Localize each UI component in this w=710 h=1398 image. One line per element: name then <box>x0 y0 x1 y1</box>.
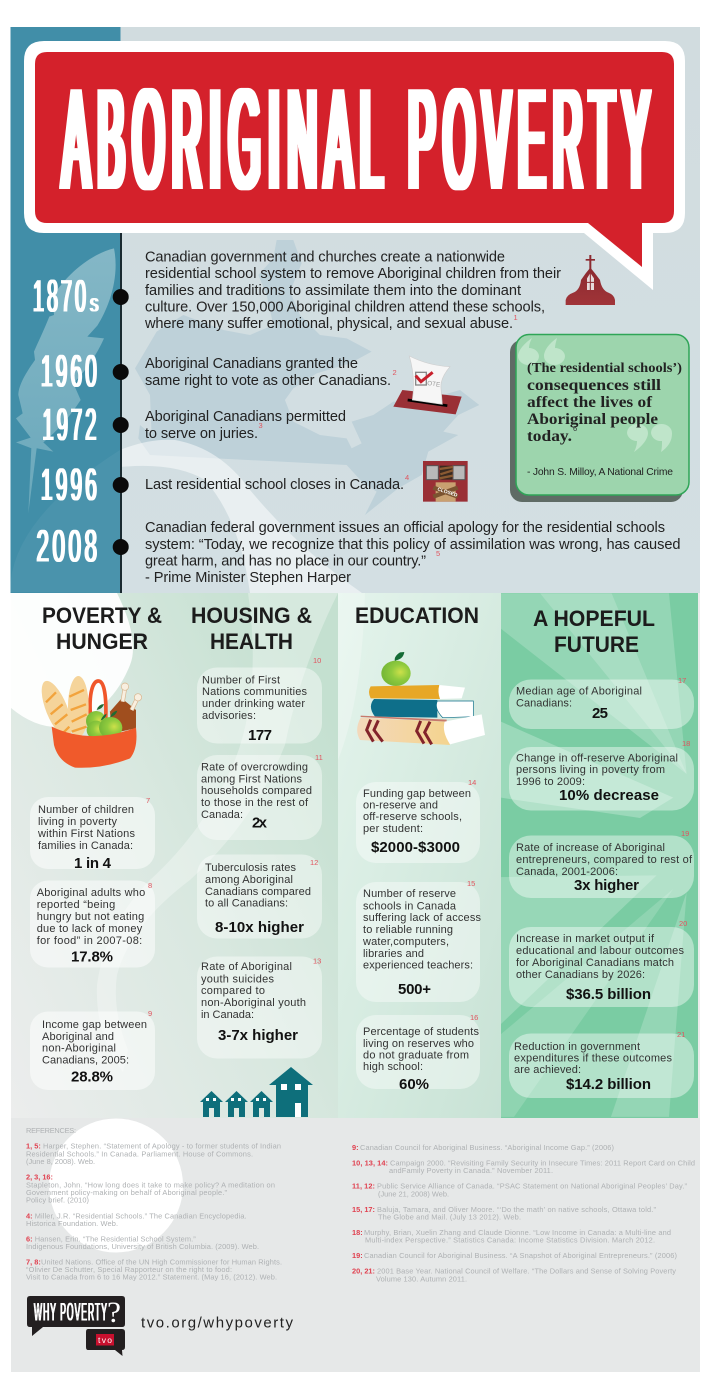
timeline: 1972: to serve on juries. <box>145 426 258 442</box>
references: right column: (June 21, 2008) Web. <box>378 1189 449 1198</box>
stat card: graduation: living on reserves who <box>363 1038 474 1050</box>
references: right column: andFamily Poverty in Canada.” November 2011. <box>389 1166 553 1175</box>
stat card: income gap: Aboriginal and <box>42 1031 114 1043</box>
references: right column: 2001 Base Year. National Council of Welfare. “The Dollars and Sense of Solving Poverty <box>377 1267 676 1276</box>
references: right column: The Globe and Mail. (July 13 2012). Web. <box>378 1213 521 1222</box>
stat card: graduation: 16 <box>470 1013 478 1022</box>
stat card: income gap: non-Aboriginal <box>42 1042 116 1054</box>
references: left column: Historica Foundation. Web. <box>26 1219 118 1228</box>
heading: poverty and hunger <box>42 603 162 654</box>
stat card: poverty decrease: persons living in poverty from <box>516 764 665 776</box>
timeline: 1972 <box>42 399 346 450</box>
stat card: graduation: Percentage of students <box>363 1026 480 1038</box>
heading: a hopeful future <box>533 606 655 657</box>
stat card: youth suicides: 13 <box>313 956 321 966</box>
stat card: children in poverty: within First Nations <box>37 828 136 840</box>
stat card: graduation <box>356 1013 480 1093</box>
panel: education <box>355 603 485 1093</box>
panel: a hopeful future <box>509 606 694 1098</box>
timeline: 1870s: Canadian government and churches create a nationwide <box>145 250 505 266</box>
timeline: 1960: 1960 <box>41 346 100 396</box>
stat card: entrepreneurs: Rate of increase of Aboriginal <box>516 842 665 854</box>
callout: Milloy quote: affect the lives of <box>527 394 653 411</box>
timeline: 1870s: families and traditions to assimilate them into the dominant <box>145 283 521 299</box>
icon: opening quote marks <box>518 338 565 365</box>
callout: Milloy quote: Aboriginal people <box>527 411 658 428</box>
stat card: market output: for Aboriginal Canadians match <box>516 957 674 969</box>
stat card: funding gap: per student: <box>363 823 423 835</box>
references: right column: 19: <box>352 1251 363 1260</box>
timeline: 1972: Aboriginal Canadians permitted <box>145 409 346 425</box>
stat card: drinking water: under drinking water <box>202 698 305 710</box>
icon: closed school: CLOSED <box>436 487 458 499</box>
stat card: reserve schools: suffering lack of access <box>363 912 482 924</box>
stat card: drinking water: 177 <box>248 727 272 744</box>
stat card: funding gap: $2000-$3000 <box>371 839 460 856</box>
stat card: reserve schools <box>356 879 482 1002</box>
stat card: youth suicides: compared to <box>201 985 265 997</box>
stat card: market output: $36.5 billion <box>566 986 651 1003</box>
references: right column: Baluja, Tamara, and Oliver Moore. “‘Do the math’ on native schools, Ottawa told.” <box>377 1205 657 1214</box>
references: right column: 18: <box>352 1228 363 1237</box>
references: left column: REFERENCES: <box>26 1126 76 1135</box>
stat card: reserve schools: water,computers, <box>362 936 449 948</box>
stat card: children in poverty <box>30 796 155 872</box>
stat card: children in poverty: 7 <box>146 796 150 805</box>
references: left column: Stapleton, John. “How long does it take to make policy? A meditation on <box>26 1180 275 1189</box>
references: right column: Murphy, Brian, Xuelin Zhang and Claude Dionne. “Low Income in Canada: a Multi-line and <box>364 1228 671 1237</box>
stat card: hungry adults: for food” in 2007-08: <box>37 935 142 947</box>
stat card: children in poverty: families in Canada: <box>38 840 133 852</box>
logo: Why Poverty?: tvo <box>98 1335 112 1345</box>
stat card: poverty decrease <box>509 739 694 810</box>
timeline: 1996: 1996 <box>41 459 100 510</box>
stat card: funding gap: on-reserve and <box>363 800 438 812</box>
references: right column: Multi-index Perspective.” Statistics Canada: Income Statistics Division. March 2012. <box>365 1236 655 1245</box>
references: left column: Government policy-making on behalf of Aboriginal people.” <box>26 1188 228 1197</box>
references: left column: Hansen, Erin. “The Residential School System.” <box>35 1234 196 1243</box>
timeline: 1870s <box>33 250 561 332</box>
stat card: graduation: 60% <box>399 1076 429 1093</box>
callout: Milloy quote: - John S. Milloy, A National Crime <box>527 467 673 478</box>
stat card: youth suicides: Rate of Aboriginal <box>201 961 292 973</box>
stat card: reserve schools: Number of reserve <box>363 888 456 900</box>
timeline: 1870s: 1870 <box>33 270 89 322</box>
timeline: 1996 <box>41 459 409 510</box>
stat card: drinking water: advisories: <box>202 710 256 722</box>
references: left column: Miller, J.R. “Residential Schools.” The Canadian Encyclopedia. <box>35 1211 247 1220</box>
references: right column: Public Service Alliance of Canada. “PSAC Statement on National Aboriginal Peoples’ Day.” <box>377 1182 688 1191</box>
icon: ballot box: OTE <box>427 380 441 389</box>
stat card: funding gap: 14 <box>468 778 476 787</box>
heading: poverty and hunger: HUNGER <box>56 629 148 654</box>
stat card: hungry adults: hungry but not eating <box>37 911 144 923</box>
heading: a hopeful future: FUTURE <box>554 632 639 657</box>
website url: tvo.org/whypoverty <box>141 1314 294 1332</box>
stat card: tuberculosis: 12 <box>310 858 318 867</box>
references: left column: Indigenous Foundations, University of British Columbia. (2009). Web. <box>26 1242 259 1251</box>
stat card: graduation: do not graduate from <box>363 1050 469 1062</box>
icon: books and apple <box>357 652 485 745</box>
stat card: drinking water <box>197 656 322 744</box>
timeline: 1960: same right to vote as other Canadians. <box>145 373 391 389</box>
timeline: 1972: 3 <box>258 421 263 430</box>
stat card: children in poverty: Number of children <box>38 804 134 816</box>
references: left column: Residential Schools.” In Canada. Parliament. House of Commons. <box>26 1149 253 1158</box>
stat card: hungry adults: due to lack of money <box>37 923 143 935</box>
icon: row of houses <box>200 1067 313 1117</box>
stat card: overcrowding: among First Nations <box>201 774 302 786</box>
stat card: income gap: 28.8% <box>71 1068 113 1086</box>
timeline axis <box>120 233 122 593</box>
references: right column: Canadian Council for Aboriginal Business. “A Snapshot of Aboriginal Entrepreneurs.” (2006) <box>364 1251 677 1260</box>
stat card: reserve schools: 15 <box>467 879 475 888</box>
heading: education: EDUCATION <box>355 603 479 628</box>
references: right column: 15, 17: <box>352 1205 375 1214</box>
timeline: 2008: Canadian federal government issues an official apology for the residential schools <box>145 520 665 536</box>
references: right column: 10, 13, 14: <box>352 1158 388 1167</box>
stat card: market output: other Canadians by 2026: <box>516 969 645 981</box>
stat card: overcrowding: to those in the rest of <box>201 797 309 809</box>
icon: closed school <box>423 461 468 502</box>
stat card: median age: Canadians: <box>516 698 572 710</box>
icon: ballot box <box>393 356 462 414</box>
stat card: reserve schools: 500+ <box>398 981 431 998</box>
stat card: reserve schools: libraries and <box>363 948 424 960</box>
decorative swirl <box>120 440 362 593</box>
references: left column: 2, 3, 16: <box>26 1173 53 1182</box>
stat card: reserve schools: schools in Canada <box>363 900 457 912</box>
stat card: overcrowding: Rate of overcrowding <box>201 762 308 774</box>
stat card: overcrowding <box>197 753 323 840</box>
stat card: reserve schools: experienced teachers: <box>363 960 473 972</box>
text: WHY POVERTY <box>34 1298 108 1326</box>
panel: poverty and hunger <box>30 603 162 1090</box>
title speech bubble <box>24 41 685 290</box>
stat card: drinking water: Number of First <box>202 674 280 686</box>
references: right column: 20, 21: <box>352 1267 375 1276</box>
stat card: market output: educational and labour outcomes <box>516 945 684 957</box>
callout: Milloy quote <box>510 334 689 502</box>
icon: feather <box>16 248 116 513</box>
panel: statistics background <box>11 593 700 1118</box>
stat card: entrepreneurs: Canada, 2001-2006: <box>516 866 618 878</box>
references: left column <box>26 1126 282 1282</box>
stat card: entrepreneurs: 19 <box>681 829 689 838</box>
stat card: income gap: 9 <box>148 1009 152 1018</box>
stat card: market output: Increase in market output if <box>516 933 655 945</box>
stat card: youth suicides <box>197 956 322 1058</box>
timeline: 1960: 2 <box>392 368 397 377</box>
timeline: 1870s: s <box>90 290 98 318</box>
timeline: 1960 <box>41 346 397 396</box>
stat card: poverty decrease: 18 <box>682 739 690 748</box>
stat card: graduation: high school: <box>363 1061 423 1073</box>
stat card: children in poverty: living in poverty <box>38 816 118 828</box>
stat card: funding gap: Funding gap between <box>363 788 471 800</box>
stat card: youth suicides: in Canada: <box>201 1009 254 1021</box>
timeline: 1972: 1972 <box>42 399 100 450</box>
heading: housing and health <box>191 603 312 654</box>
references: left column: Visit to Canada from 6 to 16 May 2012.” Statement. (May 16, (2012). Web. <box>26 1273 277 1282</box>
stat card: median age: 17 <box>678 676 686 685</box>
timeline: 1996: Last residential school closes in Canada. <box>145 477 404 493</box>
stat card: youth suicides: 3-7x higher <box>218 1027 298 1044</box>
timeline: 1870s: 1 <box>514 313 518 322</box>
panel: timeline background <box>10 27 700 593</box>
timeline: 1870s: residential school system to remove Aboriginal children from their <box>145 266 561 282</box>
stat card: reduced expenditures: are achieved: <box>514 1064 581 1076</box>
panel: references background <box>11 1118 700 1372</box>
stat card: funding gap <box>356 778 480 863</box>
stat card: overcrowding: 2x <box>252 814 268 832</box>
references: left column: 4: <box>26 1211 33 1220</box>
callout: Milloy quote: (The residential schools’) <box>527 360 682 375</box>
heading: housing and health: HOUSING & <box>191 603 312 628</box>
stat card: entrepreneurs: entrepreneurs, compared to rest of <box>516 854 693 866</box>
icon: food basket <box>36 676 142 768</box>
stat card: hungry adults: 17.8% <box>71 948 113 966</box>
stat card: entrepreneurs: 3x higher <box>574 877 639 894</box>
references: right column: 9: <box>352 1143 359 1152</box>
references: right column <box>352 1143 695 1283</box>
stat card: hungry adults: reported “being <box>37 899 115 911</box>
logo: Why Poverty?: ? <box>107 1296 121 1329</box>
stat card: tuberculosis: 8-10x higher <box>215 919 304 936</box>
stat card: median age: Median age of Aboriginal <box>516 686 642 698</box>
logo: Why Poverty? <box>27 1296 125 1356</box>
stat card: entrepreneurs <box>509 829 694 898</box>
stat card: poverty decrease: 10% decrease <box>559 787 659 804</box>
stat card: tuberculosis: Canadians compared <box>205 886 311 898</box>
timeline: 1960: Aboriginal Canadians granted the <box>145 356 358 372</box>
callout: Milloy quote: 6 <box>573 424 577 433</box>
stat card: market output: 20 <box>679 919 687 928</box>
timeline: 2008: - Prime Minister Stephen Harper <box>145 570 351 586</box>
timeline: 2008: 2008 <box>36 520 100 572</box>
stat card: overcrowding: Canada: <box>201 809 243 821</box>
references: left column: 7, 8: <box>26 1257 41 1266</box>
stat card: tuberculosis: Tuberculosis rates <box>205 862 296 874</box>
map of Canada <box>135 240 479 515</box>
references: right column: Canadian Council for Aboriginal Business. “Aboriginal Income Gap.” (2006) <box>360 1143 614 1152</box>
heading: a hopeful future: A HOPEFUL <box>533 606 655 631</box>
stat card: tuberculosis: among Aboriginal <box>205 874 293 886</box>
timeline: 2008 <box>36 520 680 586</box>
stat card: poverty decrease: Change in off-reserve Aboriginal <box>516 752 678 764</box>
stat card: hungry adults <box>30 880 155 968</box>
callout: Milloy quote: today. <box>527 428 572 445</box>
timeline: 1870s: culture. Over 150,000 Aboriginal children attend these schools, <box>145 300 545 316</box>
stat card: reduced expenditures: 21 <box>677 1030 685 1039</box>
stat card: reduced expenditures: $14.2 billion <box>566 1076 651 1093</box>
references: right column: Campaign 2000. “Revisiting Family Security in Insecure Times: 2011 Report Card on Child <box>390 1158 695 1167</box>
stat card: youth suicides: non-Aboriginal youth <box>201 997 306 1009</box>
stat card: tuberculosis: to all Canadians: <box>205 898 288 910</box>
stat card: children in poverty: 1 in 4 <box>74 855 112 872</box>
references: left column: 6: <box>26 1234 33 1243</box>
stat card: reduced expenditures: expenditures if these outcomes <box>514 1052 672 1064</box>
references: left column: United Nations. Office of the UN High Commissioner for Human Rights. <box>41 1257 282 1266</box>
stat card: income gap: Canadians, 2005: <box>42 1054 129 1066</box>
panel: housing and health <box>191 603 323 1117</box>
references: left column: “Olivier De Schutter, Special Rapporteur on the right to food: <box>26 1265 232 1274</box>
stat card: median age: 25 <box>592 705 608 722</box>
references: left column: (June 8, 2008). Web. <box>26 1157 95 1166</box>
icon: closing quote marks <box>627 424 672 452</box>
references: left column: Harper, Stephen. “Statement of Apology - to former students of Indian <box>43 1142 281 1151</box>
timeline: 2008: 5 <box>436 549 440 558</box>
stat card: hungry adults: 8 <box>148 881 152 890</box>
timeline: 1870s: where many suffer emotional, physical, and sexual abuse. <box>144 316 513 332</box>
timeline: 1996: 4 <box>405 473 409 482</box>
stat card: poverty decrease: 1996 to 2009: <box>516 776 585 788</box>
stat card: overcrowding: households compared <box>201 785 312 797</box>
stat card: reduced expenditures: Reduction in government <box>514 1041 640 1053</box>
stat card: market output <box>509 919 694 1007</box>
stat card: drinking water: Nations communities <box>202 686 308 698</box>
heading: housing and health: HEALTH <box>210 629 293 654</box>
stat card: tuberculosis <box>197 854 322 938</box>
timeline: 2008: great harm, and has no place in our country.” <box>145 554 426 570</box>
stat card: reduced expenditures <box>509 1030 694 1098</box>
stat card: drinking water: 10 <box>313 656 321 665</box>
references: right column: 11, 12: <box>352 1182 375 1191</box>
stat card: hungry adults: Aboriginal adults who <box>37 887 145 899</box>
stat card: overcrowding: 11 <box>315 753 323 762</box>
heading: poverty and hunger: POVERTY & <box>42 603 162 628</box>
icon: church <box>566 255 615 305</box>
stat card: reserve schools: to reliable running <box>363 924 453 936</box>
stat card: youth suicides: youth suicides <box>201 974 274 986</box>
stat card: income gap <box>30 1009 155 1090</box>
references: left column: 1, 5: <box>26 1142 41 1151</box>
stat card: funding gap: off-reserve schools, <box>363 811 462 823</box>
timeline: 2008: system: “Today, we recognize that this policy of assimilation was wrong, has caused <box>145 537 680 553</box>
callout: Milloy quote: consequences still <box>527 377 662 394</box>
stat card: median age <box>509 676 694 729</box>
references: right column: Volume 130. Autumn 2011. <box>376 1274 467 1283</box>
references: left column: Policy brief. (2010) <box>26 1196 89 1205</box>
stat card: income gap: Income gap between <box>42 1019 147 1031</box>
